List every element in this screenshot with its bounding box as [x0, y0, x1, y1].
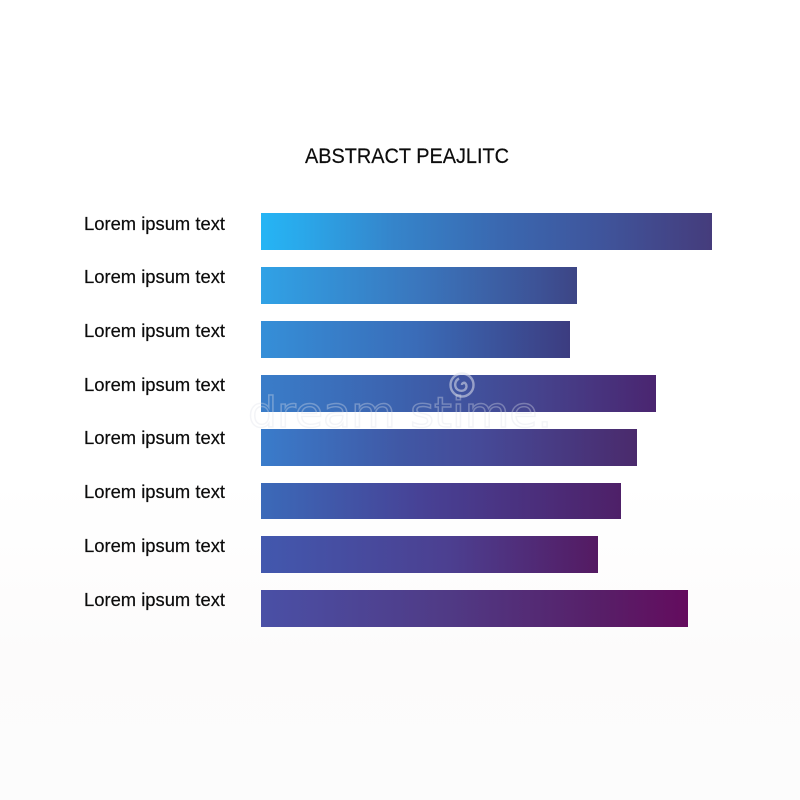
bar 1: [261, 213, 712, 250]
bar 8: [261, 590, 688, 627]
bar 2: [261, 267, 577, 304]
bar chart: [261, 213, 712, 627]
label 5: Lorem ipsum text: [84, 428, 225, 448]
label 6: Lorem ipsum text: [84, 482, 225, 502]
label 1: Lorem ipsum text: [84, 214, 225, 234]
label 3: Lorem ipsum text: [84, 321, 225, 341]
label 8: Lorem ipsum text: [84, 590, 225, 610]
bar 6: [261, 483, 621, 519]
bar 5: [261, 429, 637, 466]
label 2: Lorem ipsum text: [84, 267, 225, 287]
label 4: Lorem ipsum text: [84, 375, 225, 395]
row labels: [84, 214, 225, 610]
bar 3: [261, 321, 570, 358]
watermark spiral icon: [450, 374, 474, 396]
bar 7: [261, 536, 598, 573]
label 7: Lorem ipsum text: [84, 536, 225, 556]
watermark: [248, 374, 552, 437]
watermark wordmark: dream stime.: [248, 388, 552, 437]
title: ABSTRACT PEAJLITC: [305, 145, 509, 168]
bar 4: [261, 375, 656, 412]
